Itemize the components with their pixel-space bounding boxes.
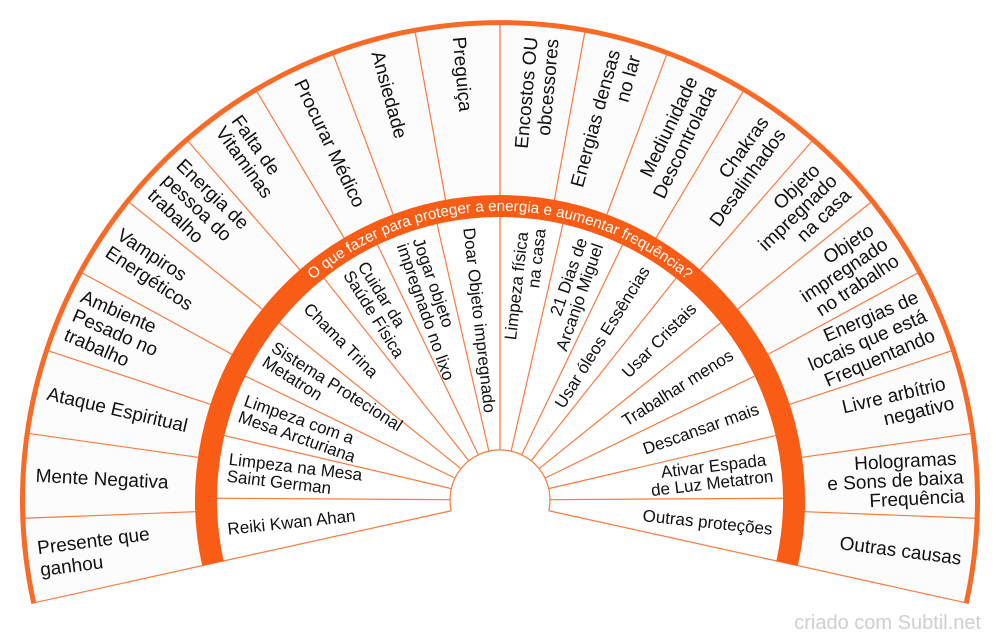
cause: Hologramas e Sons de baixa Frequência: Frequência	[869, 486, 965, 512]
cause: Falta de Vitaminas: Vitaminas	[211, 123, 277, 203]
cause: Ambiente Pesado no trabalho: trabalho	[61, 325, 132, 372]
action: Outras proteções: Outras proteções	[642, 506, 773, 539]
action: Usar Cristais: Usar Cristais	[618, 299, 700, 382]
cause: Hologramas e Sons de baixa Frequência: e Sons de baixa	[827, 467, 964, 495]
cause: Presente que ganhou: Presente que	[36, 524, 151, 559]
cause: Mediunidade Descontrolada: Mediunidade	[637, 73, 703, 181]
action: Chama Trina: Chama Trina	[300, 299, 382, 382]
action: Cuidar da Saúde Física: Cuidar da	[354, 258, 409, 331]
action: Limpeza na Mesa Saint German: Saint German	[226, 467, 332, 498]
action: Reiki Kwan Ahan: Reiki Kwan Ahan	[227, 506, 356, 539]
cause: Objeto impregnado no trabalho: no trabalho	[812, 251, 903, 321]
action: 21 Dias de Arcanjo Miguel: 21 Dias de	[547, 235, 591, 318]
cause: Objeto impregnado no trabalho: impregnado	[797, 234, 892, 307]
protections, left half	[226, 227, 499, 539]
action: Trabalhar menos: Trabalhar menos	[619, 346, 737, 430]
cause: Mediunidade Descontrolada: Descontrolada	[650, 82, 722, 202]
causes, left half	[35, 36, 475, 581]
action: Doar Objeto impregnado: Doar Objeto impregnado	[459, 227, 499, 414]
cause: Procurar Médico: Procurar Médico	[289, 76, 369, 211]
cause: Ataque Espiritual: Ataque Espiritual	[45, 384, 189, 437]
cause: Falta de Vitaminas: Falta de	[227, 112, 284, 179]
ring heading: O que fazer para proteger a energia e aumentar frequência?	[308, 201, 692, 278]
cause: Energias de locais que está Frequentando: Energias de	[820, 287, 922, 347]
action: Sistema Protecional Metatron: Sistema Protecional	[268, 338, 406, 435]
cause: Ambiente Pesado no trabalho: Pesado no	[69, 306, 161, 361]
cause: Vampiros Energéticos: Energéticos	[101, 242, 196, 315]
action: Jogar objeto impregnado no lixo: Jogar objeto	[409, 235, 458, 330]
cause: Energia de pessoa do trabalho: Energia de	[172, 155, 253, 234]
cause: Presente que ganhou: ganhou	[39, 552, 104, 581]
watermark: criado com Subtil.net	[794, 612, 981, 634]
cause: Objeto impregnado na casa: na casa	[793, 185, 856, 246]
cause: Mente Negativa: Mente Negativa	[35, 466, 169, 494]
cause: Energias densas no lar: no lar	[613, 53, 646, 105]
causes, right half	[512, 36, 965, 570]
action: Cuidar da Saúde Física: Saúde Física	[339, 267, 408, 362]
cause: Livre arbítrio negativo: negativo	[882, 393, 956, 430]
action: 21 Dias de Arcanjo Miguel: Arcanjo Miguel	[552, 241, 607, 353]
action: Limpeza com a Mesa Arcturiana: Mesa Arcturiana	[236, 407, 358, 467]
action: Usar óleos Essências: Usar óleos Essências	[551, 263, 654, 412]
action: Limpeza física na casa: Limpeza física	[501, 230, 532, 341]
central orange ring	[206, 206, 794, 563]
cause: Energias de locais que está Frequentando: locais que está	[805, 306, 930, 376]
cause: Encostos OU obcessores: obcessores	[534, 38, 564, 137]
action: Limpeza física na casa: na casa	[524, 227, 550, 289]
cause: Preguiça: Preguiça	[448, 36, 475, 113]
cause: Livre arbítrio negativo: Livre arbítrio	[840, 374, 948, 418]
cause: Ansiedade: Ansiedade	[366, 49, 410, 141]
action: Ativar Espada de Luz Metatron: Ativar Espada	[660, 450, 768, 482]
action: Sistema Protecional Metatron: Metatron	[259, 353, 326, 404]
cause: Encostos OU obcessores: Encostos OU	[512, 36, 543, 149]
cause: Outras causas: Outras causas	[838, 533, 963, 570]
action: Descansar mais: Descansar mais	[640, 400, 762, 458]
cause: Objeto impregnado na casa: impregnado	[755, 171, 842, 255]
action: Limpeza na Mesa Saint German: Limpeza na Mesa	[228, 450, 364, 485]
cause: Chakras Desalinhados: Chakras	[715, 113, 774, 183]
cause: Energias de locais que está Frequentando: Frequentando	[821, 325, 938, 392]
cause: Energia de pessoa do trabalho: trabalho	[143, 185, 207, 248]
cause: Energia de pessoa do trabalho: pessoa do	[158, 170, 235, 246]
cause: Objeto impregnado no trabalho: Objeto	[820, 220, 878, 269]
action: Limpeza com a Mesa Arcturiana: Limpeza com a	[241, 391, 357, 448]
action: Ativar Espada de Luz Metatron: de Luz Metatron	[650, 467, 774, 500]
cause: Ambiente Pesado no trabalho: Ambiente	[77, 287, 159, 338]
cause: Hologramas e Sons de baixa Frequência: Hologramas	[854, 449, 957, 475]
cause: Energias densas no lar: Energias densas	[567, 48, 625, 190]
cause: Objeto impregnado na casa: Objeto	[770, 160, 825, 214]
action: Jogar objeto impregnado no lixo: impregnado no lixo	[393, 241, 458, 383]
cause: Vampiros Energéticos: Vampiros	[113, 225, 190, 286]
cause: Chakras Desalinhados: Desalinhados	[706, 125, 791, 231]
protections, right half	[501, 225, 774, 539]
